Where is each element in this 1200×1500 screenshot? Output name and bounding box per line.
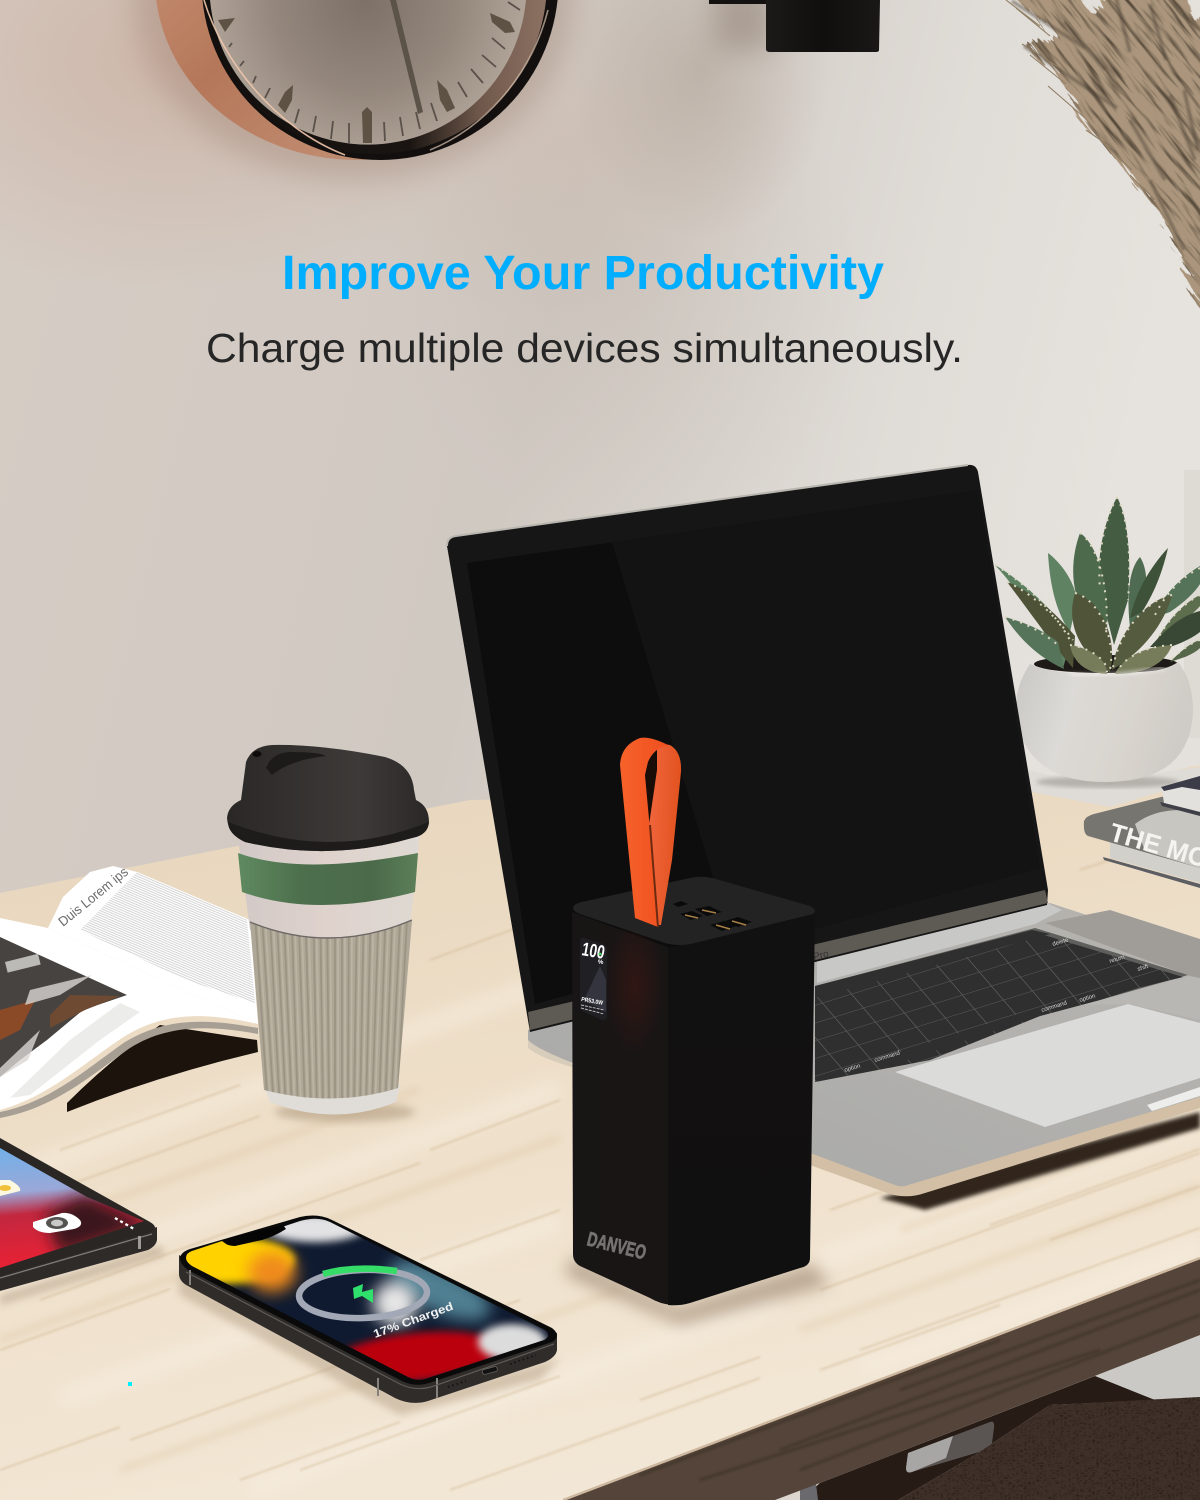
tablet shadow <box>0 1245 165 1305</box>
magazine photo <box>0 937 127 1077</box>
phone side band <box>190 1270 437 1398</box>
olive left leaf <box>1007 582 1075 668</box>
key top row bar <box>815 930 1050 998</box>
wood grain lines <box>0 830 1200 1490</box>
status dots <box>115 1218 134 1229</box>
orange bloom <box>248 1252 296 1292</box>
upper standing page <box>48 866 258 1024</box>
wall lamp <box>709 0 880 52</box>
left band <box>620 738 668 927</box>
body text block <box>80 872 255 1003</box>
magazine shadow <box>67 1025 258 1112</box>
desk plant <box>995 497 1200 807</box>
power bank <box>565 738 830 1325</box>
left tall leaf <box>1073 533 1107 640</box>
grey cover book <box>1084 796 1200 868</box>
status dot <box>599 953 601 955</box>
desk edge face <box>566 1259 1200 1500</box>
teal bloom <box>380 1254 500 1330</box>
phone side <box>179 1255 557 1403</box>
charge ring <box>298 1268 428 1320</box>
desk front edge <box>562 1257 1200 1500</box>
display reflection <box>584 966 606 1012</box>
tablet <box>0 1138 165 1305</box>
plume body <box>845 0 1200 426</box>
laptop <box>447 465 1200 1210</box>
lid chin <box>528 890 1048 1030</box>
laptop base <box>528 903 1200 1186</box>
tall center leaf <box>1099 497 1129 645</box>
white top bloom <box>265 1214 365 1242</box>
right front leaf <box>1112 595 1172 670</box>
black bezel <box>202 0 558 160</box>
tablet side line <box>0 1234 152 1278</box>
lid sip hole <box>252 751 262 757</box>
lid recess <box>266 752 326 775</box>
minute ticks <box>229 2 520 143</box>
front notch highlight <box>1147 1087 1200 1111</box>
dark plume streaks <box>1012 0 1198 250</box>
sleeve ribs <box>255 922 408 1098</box>
right face <box>668 912 815 1305</box>
light wood bands <box>16 983 898 1394</box>
bank top <box>573 877 815 945</box>
open magazine <box>0 864 258 1118</box>
phone screen <box>186 1218 548 1380</box>
handle highlight <box>906 1436 953 1472</box>
speaker grilles <box>448 1355 536 1387</box>
cup base <box>264 1085 400 1114</box>
low left leaf <box>1005 617 1064 669</box>
power details <box>581 1005 604 1014</box>
white right bloom <box>478 1324 546 1360</box>
space bar <box>892 1010 1050 1060</box>
clock face <box>209 0 527 145</box>
clock shadow <box>133 0 577 180</box>
tray surface <box>1030 738 1200 787</box>
floor behind desk <box>1095 1335 1200 1400</box>
red reflection <box>605 915 665 1055</box>
strap inner shadow <box>645 751 668 927</box>
lamp shadow <box>715 0 775 50</box>
right olive leaf <box>1157 595 1200 640</box>
article heading: Duis Lorem ips <box>55 864 131 929</box>
photo window <box>5 954 41 973</box>
copper frame <box>155 0 559 160</box>
display panel <box>580 938 607 1020</box>
keyboard well <box>815 928 1188 1082</box>
pale front left leaf <box>1070 645 1107 674</box>
cup shadow <box>275 1102 415 1122</box>
model label: Pro <box>812 949 830 963</box>
right band <box>649 743 681 925</box>
center front leaf <box>1072 593 1112 672</box>
inner metal ring <box>203 0 547 154</box>
photo white detail <box>0 975 92 1077</box>
key legend command left: command <box>874 1050 901 1064</box>
tray <box>1028 767 1200 807</box>
yellow bloom <box>155 1236 295 1284</box>
chair back handle <box>906 1422 994 1472</box>
back leaf <box>1128 557 1146 635</box>
phone top <box>180 1216 557 1385</box>
slim right leaf <box>1130 548 1168 618</box>
battery percent: 100 <box>580 938 606 963</box>
key legend delete: delete <box>1052 937 1070 948</box>
keys <box>815 932 1183 1082</box>
desk edge highlight <box>563 1258 1200 1500</box>
cup body <box>238 835 420 943</box>
icon tile <box>33 1213 81 1233</box>
left face <box>572 912 672 1305</box>
shadow under desk <box>800 1376 1155 1500</box>
laptop lid <box>447 465 1048 1032</box>
left pale leaf <box>1048 553 1077 632</box>
stacked books <box>1084 776 1200 888</box>
orange strap <box>620 738 681 927</box>
lower book cover <box>1103 857 1200 888</box>
photos app icon <box>0 1180 20 1196</box>
phone shadow <box>178 1275 560 1415</box>
hinge light strip <box>817 903 1062 983</box>
feather wisps <box>1006 0 1184 258</box>
key legend command right: command <box>1041 1000 1068 1014</box>
port contacts <box>685 910 746 929</box>
sleeve top line <box>250 920 412 938</box>
dark corner <box>45 1195 150 1255</box>
right of keyboard panel <box>1080 976 1200 1020</box>
tablet screen <box>0 1148 144 1268</box>
pot shadow <box>1036 776 1180 788</box>
clock hand <box>390 0 423 114</box>
camera app icon <box>33 1213 81 1233</box>
key legend shift: shift <box>1137 964 1149 973</box>
trackpad <box>895 1004 1200 1127</box>
headline: Improve Your Productivity <box>282 247 884 300</box>
brand name: DANVEO <box>585 1229 648 1264</box>
display dark area <box>467 490 1040 1004</box>
bank shadow <box>565 1256 830 1325</box>
grey floor patch <box>800 1484 818 1500</box>
lower page text <box>10 1003 140 1098</box>
lid rim shadow <box>228 822 429 851</box>
tablet side <box>0 1227 157 1291</box>
base wallpaper <box>180 1215 560 1385</box>
lamp arm <box>709 0 767 4</box>
tablet top <box>0 1138 155 1276</box>
icon center <box>0 1185 11 1191</box>
pale wedge <box>373 1281 417 1325</box>
pale front right leaf <box>1115 645 1172 674</box>
soft wood bands <box>2 1089 1198 1472</box>
small top book pages <box>1162 782 1200 812</box>
cyan marker dot <box>128 1382 132 1386</box>
ribbed sleeve <box>250 920 412 1099</box>
cup lid <box>227 745 429 851</box>
red bloom <box>344 1326 500 1380</box>
small top book cover <box>1161 776 1200 791</box>
key legend option right: option <box>1079 993 1096 1004</box>
bolt icon <box>353 1284 373 1303</box>
charge label: 17% Charged <box>372 1301 455 1341</box>
notch <box>222 1225 286 1246</box>
cover pale image <box>1135 810 1200 868</box>
aloe leaves <box>995 497 1200 674</box>
right fan leaf <box>1153 566 1200 618</box>
wall clock <box>133 0 577 180</box>
coffee cup <box>227 745 429 1122</box>
chair fabric <box>890 1390 1200 1500</box>
white pot <box>1016 662 1193 782</box>
lamp cylinder <box>766 0 880 52</box>
display reflection <box>612 490 1040 950</box>
handle body <box>906 1422 994 1472</box>
charge progress arc <box>323 1269 397 1274</box>
smartphone <box>155 1214 560 1415</box>
phone side line <box>186 1272 554 1389</box>
hour markers <box>218 13 515 143</box>
pampas grass <box>845 0 1200 426</box>
right wall column <box>1184 470 1200 750</box>
far left leaf <box>995 565 1072 668</box>
pot rim highlight <box>1070 668 1165 676</box>
photo orange left <box>0 1000 35 1040</box>
bottom page edge <box>0 1022 258 1118</box>
low right leaf <box>1170 640 1200 662</box>
lid highlight edge <box>447 465 968 546</box>
charging port <box>482 1366 498 1375</box>
icon lens inner <box>51 1220 63 1226</box>
wallpaper <box>0 1148 144 1268</box>
small book bottom cover <box>1160 802 1200 816</box>
display body <box>580 938 607 1020</box>
photo orange detail <box>50 995 120 1028</box>
USB ports <box>673 901 752 931</box>
subtitle: Charge multiple devices simultaneously. <box>206 325 963 371</box>
highlight arc <box>204 0 345 155</box>
chrome arc right <box>430 10 548 150</box>
key legend option left: option <box>844 1063 861 1074</box>
wall background <box>0 0 1200 1000</box>
power reading: PR53.0W <box>581 997 604 1007</box>
strap fold line <box>650 825 658 927</box>
laptop shadow <box>880 1112 1200 1210</box>
port slots <box>673 901 752 931</box>
desk top <box>0 760 1200 1500</box>
green stripe <box>238 853 418 905</box>
left base edge <box>528 1040 575 1068</box>
tablet antenna band <box>138 1236 141 1249</box>
percent sign: % <box>598 960 604 966</box>
wood surface <box>0 760 1200 1500</box>
lower spread page <box>0 918 258 1110</box>
key legend return: return <box>1109 955 1126 965</box>
leaf teeth <box>995 497 1200 672</box>
lower book pages <box>1110 842 1200 883</box>
laptop front edge <box>810 1095 1200 1196</box>
upper right palm strip <box>1045 910 1200 985</box>
icon lens <box>46 1217 68 1229</box>
right dark leaf <box>1150 611 1200 647</box>
pot soil <box>1034 655 1178 673</box>
